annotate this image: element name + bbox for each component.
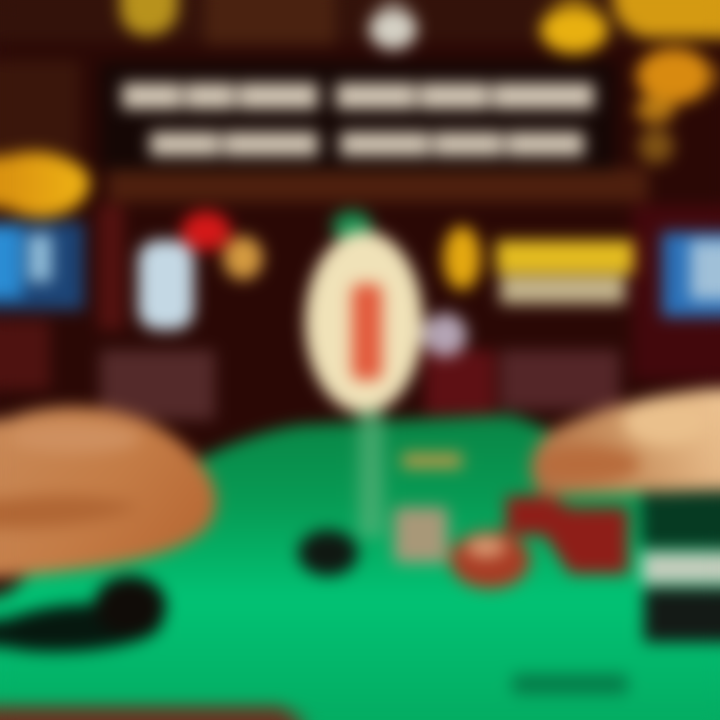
left hand: [0, 407, 217, 652]
wall panel: white figure with red accent: [138, 211, 263, 330]
chip stack: right: [642, 492, 720, 642]
wall panel: far right blue and white: [662, 232, 720, 317]
dealer marker stem: [358, 412, 384, 537]
wall panel: right gold signs: [423, 226, 634, 357]
title: illegible blurred two-line heading: [122, 96, 594, 144]
left gold ornament: [0, 152, 90, 218]
poker chips and cards on table: [298, 453, 628, 589]
ceiling lights and gold decoration: [120, 0, 720, 164]
title banner: dark backing panel: [100, 62, 615, 170]
faint table imprint: bottom right: [512, 674, 628, 694]
right hand: [531, 388, 720, 496]
green felt table: [0, 415, 720, 720]
wall panel: left blue and white: [0, 222, 84, 310]
central oval card with red symbol: [305, 211, 423, 413]
